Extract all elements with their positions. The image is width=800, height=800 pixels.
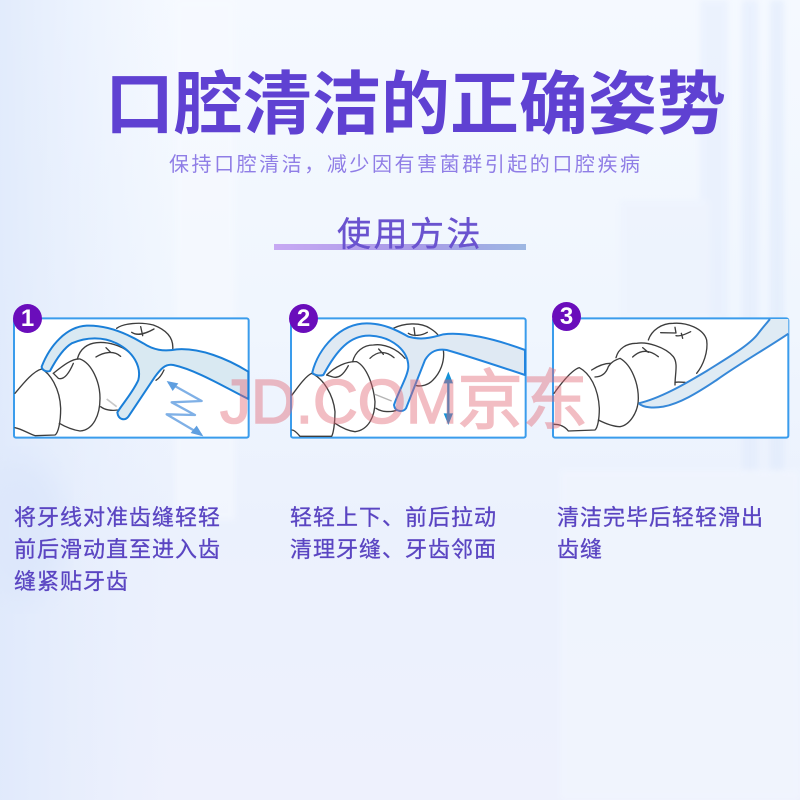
text: step 3: 齿缝 — [557, 537, 603, 562]
text: step 2: 轻轻上下、前后拉动 — [290, 505, 497, 530]
subtitle: 保持口腔清洁，减少因有害菌群引起的口腔疾病 — [169, 154, 643, 176]
text: step 1: 前后滑动直至进入齿 — [14, 537, 221, 562]
text: step 1: 缝紧贴牙齿 — [14, 569, 129, 594]
text: step 2 — [290, 505, 497, 562]
text: step 1: 将牙线对准齿缝轻轻 — [14, 505, 221, 530]
badge: step 1 — [13, 304, 42, 333]
badge: step 3: 3 — [560, 303, 573, 330]
badge: step 3 — [552, 302, 581, 331]
text: step 3 — [557, 505, 764, 562]
heading text: 使用方法 — [337, 216, 483, 254]
text: step 2: 清理牙缝、牙齿邻面 — [290, 537, 497, 562]
badge: step 1: 1 — [21, 305, 34, 332]
text: step 3: 清洁完毕后轻轻滑出 — [557, 505, 764, 530]
section heading: usage — [274, 216, 526, 254]
badge: step 2 — [289, 304, 318, 333]
badge: step 2: 2 — [297, 305, 310, 332]
watermark: JD.COM京东 — [220, 364, 588, 437]
heading underline — [274, 244, 526, 250]
text: step 1 — [14, 505, 221, 594]
title: 口腔清洁的正确姿势 — [105, 66, 726, 143]
